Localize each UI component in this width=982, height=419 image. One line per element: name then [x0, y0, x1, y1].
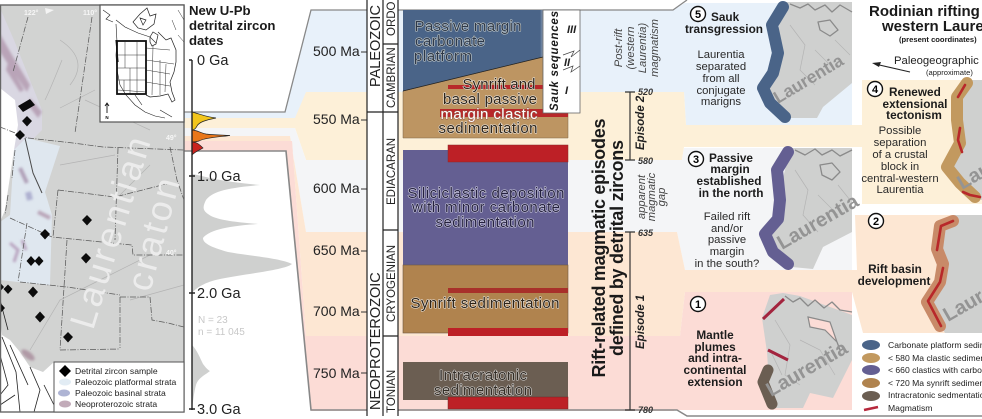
panel: sedimentary and magmatic column: [403, 10, 580, 409]
episode axis: 520: [638, 87, 653, 97]
panel: stage 4 renewed extensional tectonism: central-western: [861, 173, 939, 185]
chart: detrital zircon age density: [189, 53, 292, 418]
panel: stage 1 mantle plumes: Laurentia: [762, 337, 852, 401]
block: passive margin carbonate platform: [403, 10, 545, 91]
panel: stage 2 rift basin development: [858, 214, 982, 333]
sauk sequences box: III: [567, 24, 577, 36]
panel: stage 1 mantle plumes: and intra-: [688, 351, 742, 365]
heading: New U-Pb detrital zircon dates: New U-Pb: [189, 3, 251, 18]
panel: stage 4 renewed extensional tectonism: tectonism: [886, 108, 942, 122]
sauk sequences box: II: [564, 57, 571, 69]
panel: stage 5 Sauk transgression: marigns: [701, 96, 741, 108]
map legend: Paleozoic platformal strata: [75, 377, 176, 387]
block labels: Synrift sedimentation: [410, 295, 560, 312]
episode axis: Episode 1: [635, 295, 647, 349]
panel: stage 3 passive margin: Passive: [709, 151, 753, 165]
map graticule labels: 110°: [83, 9, 97, 17]
block labels: [408, 18, 564, 399]
panel: stage 3 passive margin: Laurentia: [774, 190, 863, 254]
panel: stage 3 passive margin: in the north: [699, 186, 763, 200]
panel: stage 1 mantle plumes: [684, 293, 852, 408]
block labels: Intracratonic: [439, 367, 528, 384]
detrital zircon sample markers: [0, 99, 92, 342]
stratigraphic column: eras and periods: NEOPROTEROZOIC: [368, 272, 384, 410]
panel: stage 5 Sauk transgression: from all: [702, 73, 740, 85]
legend: sedimentation and magmatism: Magmatism: [888, 403, 932, 413]
block labels: basal passive: [443, 91, 537, 108]
map label: Laurentian craton: craton: [118, 173, 187, 295]
panel: stage 2 rift basin development: development: [858, 274, 930, 288]
block labels: margin clastic: [440, 106, 538, 123]
time scale labels in Ma: 550 Ma: [313, 111, 360, 127]
episode axis: magmatism: [649, 19, 661, 77]
panel: stage 1 mantle plumes: extension: [687, 375, 743, 389]
sauk sequences box: I: [565, 85, 569, 97]
panel: stage 4 renewed extensional tectonism: 4: [872, 84, 879, 96]
panel: stage 4 renewed extensional tectonism: block in: [881, 161, 919, 173]
map graticule labels: 49°: [166, 134, 177, 142]
chart: detrital zircon age density: 3.0 Ga: [197, 402, 241, 418]
panel: stage 3 passive margin: Failed rift: [704, 211, 751, 223]
panel: stage 4 renewed extensional tectonism: extensional: [883, 97, 947, 111]
map legend: Paleozoic basinal strata: [75, 388, 166, 398]
block labels: sedimentation: [438, 120, 538, 137]
map legend: Detrital zircon sample: [75, 366, 158, 376]
panel: stage 3 passive margin: in the south?: [695, 258, 759, 270]
panel: stage 3 passive margin: and/or: [711, 223, 743, 235]
block labels: Synrift and: [462, 76, 536, 93]
stratigraphic column: eras and periods: ORDO: [386, 1, 398, 36]
heading: New U-Pb detrital zircon dates: [189, 3, 275, 48]
panel: stage 5 Sauk transgression: 5: [695, 9, 701, 21]
panel: stage 1 mantle plumes: 1: [695, 299, 701, 311]
time scale labels in Ma: 500 Ma: [313, 43, 360, 59]
episode axis: apparent: [636, 174, 648, 219]
episode axis: (western: [625, 27, 637, 69]
block labels: with minor carbonate: [411, 199, 560, 216]
panel: stage 3 passive margin: 3: [693, 154, 699, 166]
stratigraphic column: eras and periods: [367, 0, 398, 416]
panel: stage 4 renewed extensional tectonism: Possible: [879, 125, 921, 137]
panel: stage 5 Sauk transgression: Laurentia: [697, 49, 745, 61]
panel: map of western Laurentia: [0, 5, 187, 412]
block labels: Passive margin: [414, 18, 522, 35]
block labels: sedimentation: [434, 382, 532, 399]
panel: stage 3 passive margin: [688, 148, 863, 270]
chart: detrital zircon age density: 1.0 Ga: [197, 169, 241, 185]
map label: Laurentian craton: Laurentian: [61, 132, 159, 333]
episode axis: Laurentia): [637, 23, 649, 73]
panel: stage 4 renewed extensional tectonism: Renewed: [889, 85, 941, 99]
sauk sequences box: [543, 10, 580, 113]
stratigraphic column: eras and periods: EDIACARAN: [386, 138, 398, 205]
map legend: Neoproterozoic strata: [75, 399, 157, 409]
block: siliciclastic deposition: [403, 150, 568, 265]
episode axis: [613, 19, 668, 415]
heading: Rodinian rifting and western Laurentia: [869, 3, 982, 44]
block: synrift and basal passive margin: [403, 57, 568, 138]
map graticule labels: 40°: [166, 249, 177, 257]
episode axis: Episode 2: [635, 95, 647, 150]
time scale labels in Ma: [313, 43, 367, 381]
time scale labels in Ma: 750 Ma: [313, 365, 360, 381]
heading: Rodinian rifting and western Laurentia: (present coordinates): [899, 35, 977, 44]
panel: stage 1 mantle plumes: continental: [684, 363, 746, 377]
stratigraphic column: eras and periods: CRYOGENIAN: [386, 245, 398, 322]
stratigraphic column: eras and periods: PALEOZOIC: [368, 5, 384, 87]
sauk sequences box: Sauk sequences: [549, 11, 561, 111]
block: intracratonic sedimentation: [403, 362, 568, 400]
time scale labels in Ma: 650 Ma: [313, 242, 360, 258]
legend: sedimentation and magmatism: [862, 340, 982, 413]
panel: stage 4 renewed extensional tectonism: of a crustal: [872, 149, 928, 161]
chart: detrital zircon age density: 2.0 Ga: [197, 286, 241, 302]
inset locator box: [117, 41, 146, 94]
episode axis: gap: [656, 188, 668, 206]
age axis: [189, 60, 195, 410]
episode axis: 780: [638, 405, 653, 415]
time scale labels in Ma: 700 Ma: [313, 303, 360, 319]
panel: stage 2 rift basin development: Rift basin: [868, 262, 922, 276]
north arrow: N: [105, 115, 109, 120]
episode axis: Post-rift: [613, 28, 625, 67]
chart: detrital zircon age density: 0 Ga: [197, 53, 229, 69]
panel: stage 3 passive margin: margin: [710, 162, 750, 176]
panel: stage 5 Sauk transgression: Sauk: [711, 10, 740, 24]
panel: stage 5 Sauk transgression: [685, 2, 852, 118]
arrow: paleogeographic direction: (approximate): [926, 68, 973, 77]
episode axis: magmatic: [646, 172, 658, 221]
sample counts: N = 23: [198, 315, 228, 326]
map graticule labels: 122°: [24, 9, 39, 17]
chart: detrital zircon age density: n = 11 045: [198, 327, 245, 338]
heading: rift-related magmatic episodes: defined by detrital zircons: [607, 140, 627, 356]
panel: stage 5 Sauk transgression: conjugate: [696, 85, 746, 97]
panel: stage 3 passive margin: established: [697, 174, 761, 188]
panel: stage 5 Sauk transgression: Laurentia: [770, 50, 847, 107]
heading: rift-related magmatic episodes: Rift-related magmatic episodes: [589, 118, 609, 378]
block labels: carbonate: [415, 33, 485, 50]
panel: stage 4 renewed extensional tectonism: separation: [874, 137, 926, 149]
panel: stage 1 mantle plumes: plumes: [694, 340, 736, 354]
heading: rift-related magmatic episodes: [589, 118, 627, 378]
episode axis: 580: [638, 156, 653, 166]
panel: stage 5 Sauk transgression: separated: [696, 61, 746, 73]
heading: New U-Pb detrital zircon dates: detrital zircon: [189, 18, 275, 33]
arrow: paleogeographic direction: [872, 55, 982, 77]
panel: stage 3 passive margin: passive: [708, 234, 746, 246]
panel: stage 2 rift basin development: 2: [873, 216, 879, 228]
episode axis: 635: [638, 228, 654, 238]
panel: stage 1 mantle plumes: Mantle: [696, 328, 734, 342]
panel: stage 4 renewed extensional tectonism: Laurentia: [876, 184, 924, 196]
panel: stage 5 Sauk transgression: transgression: [685, 22, 763, 36]
block labels: sedimentation: [436, 214, 534, 231]
stratigraphic column: eras and periods: CAMBRIAN: [386, 47, 398, 108]
block: synrift sedimentation: [403, 265, 568, 333]
panel: background time bands: [184, 0, 687, 419]
map legend: [54, 362, 184, 412]
heading: New U-Pb detrital zircon dates: dates: [189, 33, 223, 48]
block labels: platform: [414, 48, 472, 65]
block labels: Siliciclastic deposition: [408, 185, 564, 202]
stratigraphic column: eras and periods: TONIAN: [386, 370, 398, 413]
map graticule labels: [24, 8, 177, 257]
panel: stage 4 renewed extensional tectonism: [861, 80, 982, 200]
panel: stage 3 passive margin: margin: [710, 246, 744, 258]
time scale labels in Ma: 600 Ma: [313, 180, 360, 196]
inset map of North America: [100, 5, 184, 122]
